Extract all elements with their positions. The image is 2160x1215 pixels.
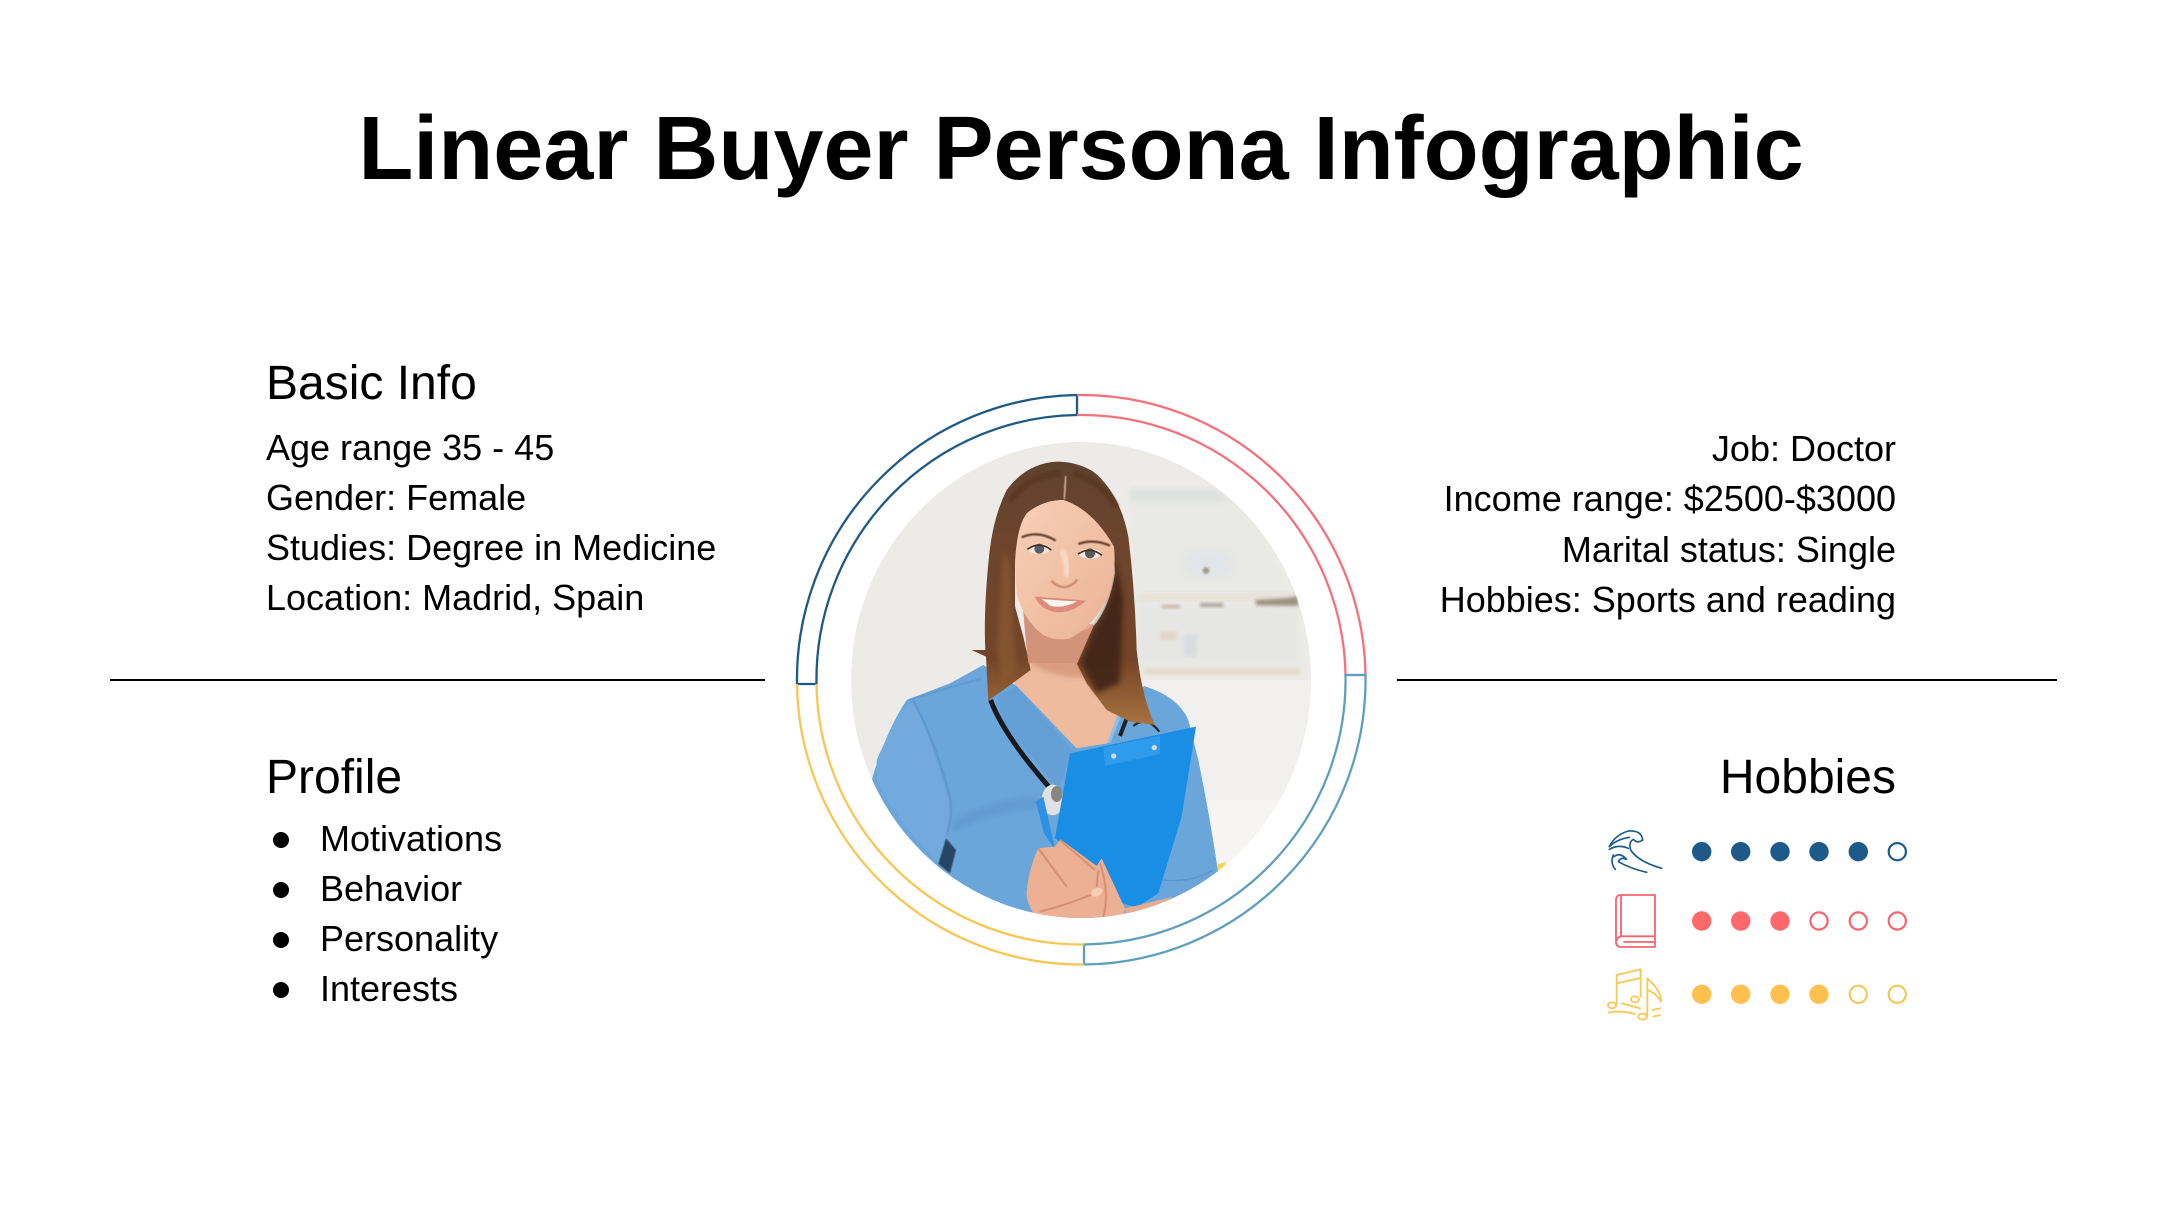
heading: hobbies: Hobbies bbox=[1720, 751, 1896, 804]
hands bbox=[1027, 839, 1125, 918]
text: location: Location: Madrid, Spain bbox=[266, 577, 644, 618]
text: studies: Studies: Degree in Medicine bbox=[266, 527, 716, 568]
icon: book bbox=[1616, 895, 1655, 947]
ring: segmented double outline bbox=[797, 395, 1366, 965]
divider: left bbox=[110, 679, 765, 681]
text: marital status: Marital status: Single bbox=[1562, 529, 1896, 570]
pen bbox=[1036, 797, 1055, 850]
head: hair and face bbox=[972, 462, 1155, 725]
title: Linear Buyer Persona Infographic bbox=[358, 99, 1804, 199]
rating: reading dots bbox=[1692, 911, 1906, 931]
clipboard bbox=[1055, 727, 1196, 907]
text: job: Job: Doctor bbox=[1712, 428, 1896, 469]
rating: music dots bbox=[1692, 985, 1906, 1004]
scrubs top bbox=[870, 665, 1218, 927]
eyes bbox=[1028, 544, 1051, 554]
divider: right bbox=[1397, 679, 2057, 681]
icon: wave bbox=[1609, 831, 1662, 872]
photo background wall bbox=[851, 442, 1311, 780]
panel: basic info bbox=[266, 357, 716, 618]
heading: basic info: Basic Info bbox=[266, 357, 477, 410]
text: hobbies summary: Hobbies: Sports and reading bbox=[1440, 579, 1896, 620]
bullet item: motivations: Motivations bbox=[320, 818, 502, 859]
neck shadow bbox=[1023, 610, 1093, 663]
text: income: Income range: $2500-$3000 bbox=[1444, 478, 1896, 519]
bullet item: personality: Personality bbox=[320, 918, 498, 959]
body: scrubs, stethoscope, clipboard, hands bbox=[870, 660, 1226, 927]
panel: profile bbox=[266, 751, 502, 1009]
nose bbox=[1052, 579, 1077, 587]
chest skin bbox=[1013, 660, 1120, 750]
photo: doctor portrait bbox=[850, 440, 1312, 927]
bullet item: behavior: Behavior bbox=[320, 868, 462, 909]
eyebrows bbox=[1022, 534, 1110, 546]
panel: job details bbox=[1440, 428, 1896, 620]
face bbox=[1015, 500, 1115, 639]
smile bbox=[1035, 597, 1086, 612]
ring segment: teal bbox=[1084, 675, 1366, 964]
stethoscope bbox=[991, 700, 1052, 790]
ring segment: navy bbox=[797, 395, 1077, 684]
text: gender: Gender: Female bbox=[266, 477, 526, 518]
text: age range: Age range 35 - 45 bbox=[266, 427, 554, 468]
bullet item: interests: Interests bbox=[320, 968, 458, 1009]
icon: music notes bbox=[1608, 969, 1661, 1020]
ring segment: red bbox=[1077, 395, 1366, 675]
heading: profile: Profile bbox=[266, 751, 402, 804]
hair bbox=[972, 462, 1155, 725]
rating: sports dots bbox=[1692, 842, 1906, 861]
neck bbox=[1023, 610, 1094, 658]
ring segment: yellow bbox=[797, 684, 1084, 965]
